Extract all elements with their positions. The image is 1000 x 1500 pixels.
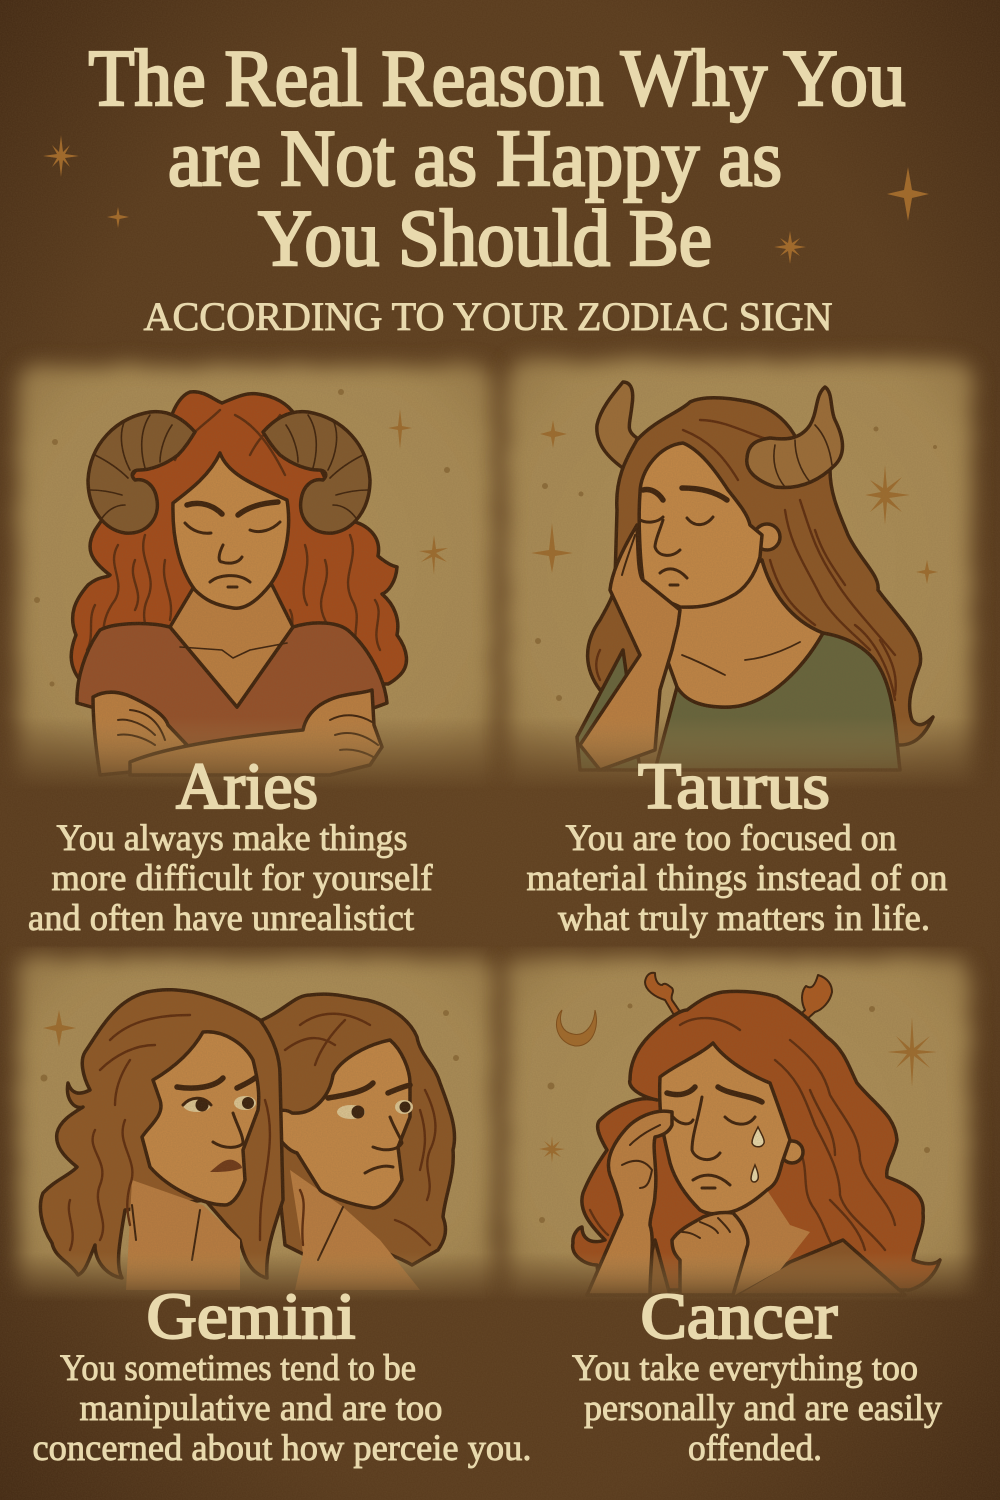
text block: Aries	[28, 818, 433, 939]
Gemini right twin neck	[290, 1170, 420, 1290]
Cancer shirt	[640, 1240, 905, 1295]
illustration: Taurus woman	[577, 382, 933, 770]
title line 2: are Not as Happy as	[168, 115, 782, 203]
Aries collarbone	[180, 643, 287, 658]
Aries shirt	[77, 623, 387, 755]
icon: Taurus right star	[916, 560, 938, 584]
text block: Gemini	[32, 1348, 532, 1469]
Cancer right claw	[787, 975, 832, 1030]
panel: Aries background	[18, 366, 494, 816]
Gemini left twin neck	[126, 1180, 240, 1290]
illustration: Gemini twins	[40, 990, 455, 1290]
Taurus arm and hand on cheek	[580, 525, 680, 770]
icon: Cancer sparkle	[887, 1017, 937, 1087]
Aries facial features	[185, 502, 280, 587]
text block: Gemini: concerned about how perceie you.	[32, 1428, 532, 1469]
illustration: Aries woman	[71, 392, 406, 775]
icon: Taurus left star	[531, 523, 573, 573]
Taurus facial features	[640, 488, 727, 585]
text block: Taurus: You are too focused on	[566, 818, 896, 859]
panel: Cancer background	[506, 958, 970, 1328]
Aries crossed right arm and hand	[130, 690, 382, 775]
Gemini left twin face	[142, 1032, 259, 1205]
specks	[34, 389, 937, 1223]
icon: star left small	[107, 207, 129, 228]
Cancer hand at eye	[587, 1111, 672, 1295]
icon: Aries sparkle	[419, 535, 448, 575]
icon: Gemini star	[43, 1010, 76, 1047]
Gemini left twin strands	[69, 1015, 270, 1250]
illustration: Cancer woman	[573, 973, 940, 1295]
Aries hair strands	[87, 410, 380, 660]
Aries right horn	[263, 412, 370, 533]
title line 1: The Real Reason Why You	[88, 35, 906, 123]
Aries left arm and hand	[93, 692, 187, 775]
Taurus ear	[754, 524, 780, 550]
icon: star left large	[43, 135, 79, 177]
text block: Taurus	[526, 818, 948, 939]
Taurus right horn	[747, 387, 842, 488]
text block: Gemini: manipulative and are too	[80, 1388, 442, 1429]
text block: Cancer: You take everything too	[572, 1348, 918, 1389]
subtitle: ACCORDING TO YOUR ZODIAC SIGN	[144, 294, 832, 339]
text block: Taurus: material things instead of on	[526, 858, 948, 899]
panel: Gemini background	[18, 958, 494, 1328]
title	[88, 35, 906, 283]
Taurus face	[639, 443, 762, 607]
heading: Gemini: Gemini	[146, 1280, 356, 1353]
Aries neck	[170, 585, 293, 707]
icon: star right small	[774, 231, 806, 264]
text block: Cancer	[572, 1348, 942, 1469]
Cancer left claw	[645, 973, 687, 1025]
Gemini left twin hair	[40, 990, 283, 1278]
Cancer hair strands	[590, 1018, 895, 1250]
icon: star right large	[887, 167, 929, 221]
text block: Aries: You always make things	[56, 818, 408, 859]
heading: Taurus: Taurus	[638, 750, 830, 823]
Aries face	[173, 453, 289, 608]
Cancer hair	[573, 991, 940, 1290]
text block: Cancer: personally and are easily	[584, 1388, 942, 1429]
text block: Taurus: what truly matters in life.	[558, 898, 930, 939]
Cancer fist under chin	[672, 1212, 748, 1295]
Taurus shirt	[577, 633, 900, 770]
icon: Aries thin star	[388, 409, 412, 449]
icon: Taurus sparkle	[865, 465, 910, 525]
Gemini right twin strands	[285, 1014, 435, 1245]
Cancer tears	[751, 1127, 764, 1182]
Taurus neck	[660, 560, 823, 707]
heading: Aries: Aries	[176, 750, 318, 823]
Cancer facial features	[667, 1087, 762, 1188]
heading: Cancer: Cancer	[640, 1280, 838, 1353]
header stars	[43, 135, 929, 264]
stars and specks in panels	[34, 389, 938, 1223]
icon: crescent moon	[556, 1010, 596, 1046]
Gemini left twin facial features	[177, 1078, 256, 1172]
Taurus hair	[588, 398, 933, 745]
Taurus collarbone	[682, 642, 800, 675]
Aries hair	[71, 392, 406, 684]
Cancer ear	[781, 1141, 803, 1163]
Cancer face	[660, 1043, 790, 1214]
Gemini necks shading lines	[132, 1205, 343, 1260]
title line 3: You Should Be	[258, 195, 712, 283]
Aries left horn	[88, 412, 195, 533]
icon: Taurus small star	[540, 420, 567, 448]
Gemini right twin hair	[262, 994, 455, 1265]
text block: Gemini: You sometimes tend to be	[60, 1348, 416, 1389]
Gemini right twin face	[270, 1040, 410, 1208]
Cancer neck	[735, 1190, 810, 1295]
Gemini right twin facial features	[328, 1083, 413, 1173]
panel: Taurus background	[506, 360, 972, 816]
text block: Aries: and often have unrealistict	[28, 898, 415, 939]
text block: Aries: more difficult for yourself	[52, 858, 433, 899]
Taurus hair strands	[596, 420, 896, 700]
icon: Cancer small sparkle	[539, 1136, 565, 1163]
Taurus left horn	[597, 382, 637, 473]
text block: Cancer: offended.	[688, 1428, 822, 1469]
